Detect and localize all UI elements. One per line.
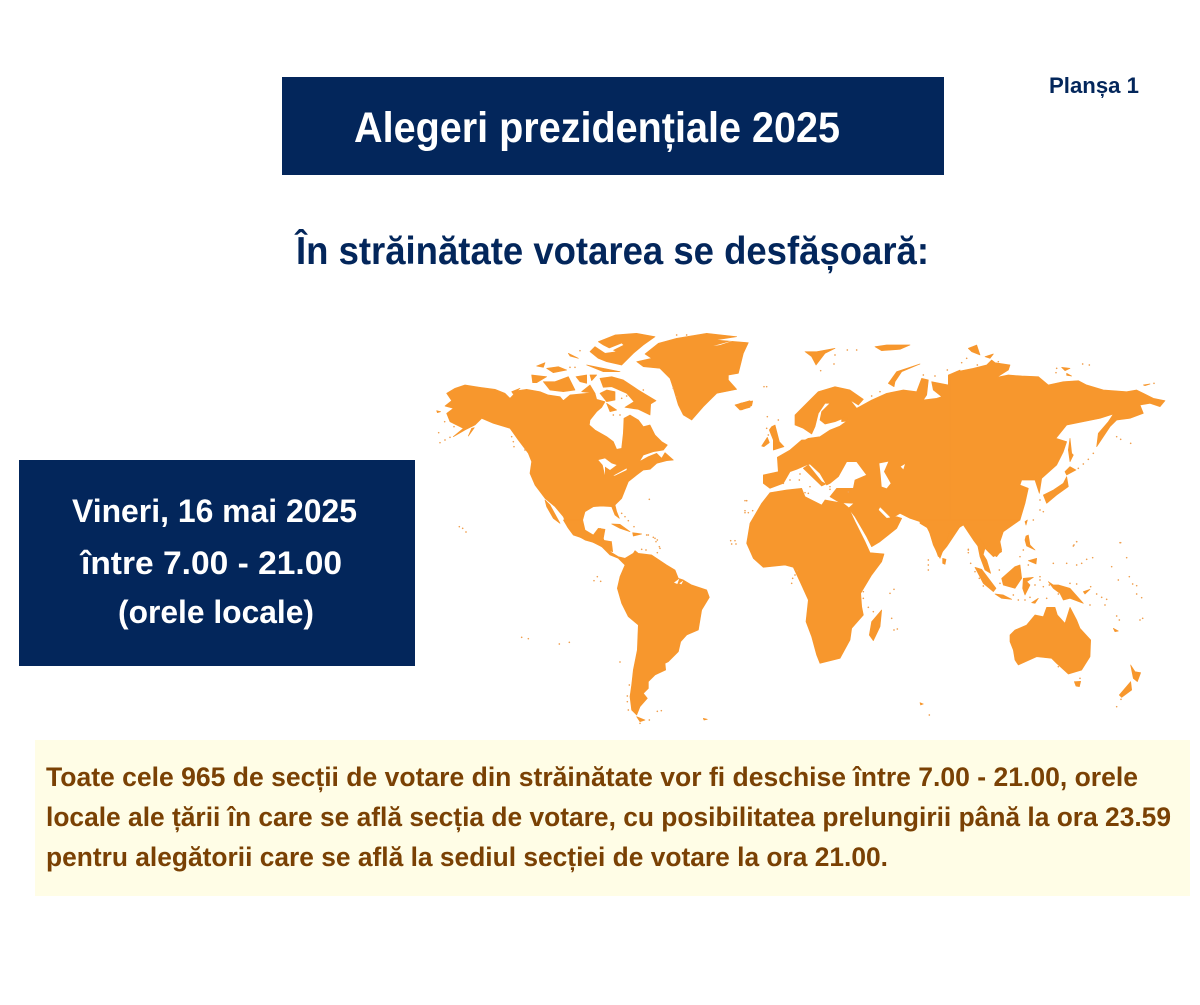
title banner — [282, 77, 944, 175]
panel: date and hours — [19, 460, 415, 666]
panel: explanatory note: pentru alegătorii care se află la sediul secției de votare la ora 21.00. — [46, 842, 888, 872]
panel: date and hours: (orele locale) — [118, 594, 314, 630]
panel: explanatory note: Toate cele 965 de secții de votare din străinătate vor fi deschise între 7.00 - 21.00, orele — [46, 762, 1138, 792]
title banner: Alegeri prezidențiale 2025 — [354, 104, 840, 152]
panel: explanatory note: locale ale țării în care se află secția de votare, cu posibilitatea prelungirii până la ora 23.59 — [46, 802, 1171, 832]
plate label: Planșa 1 — [1049, 73, 1139, 98]
island dots: north america — [439, 335, 745, 547]
panel: explanatory note — [35, 740, 1190, 896]
world map — [437, 333, 1165, 723]
panel: date and hours: între 7.00 - 21.00 — [79, 545, 342, 581]
panel: date and hours: Vineri, 16 mai 2025 — [72, 493, 357, 529]
island dots: south america — [522, 535, 661, 723]
island dots: africa — [745, 501, 897, 630]
heading: În străinătate votarea se desfășoară: — [294, 229, 929, 273]
island dots: southeast asia and oceania — [928, 542, 1143, 715]
island dots: europe — [747, 350, 947, 501]
island dots: north pacific — [962, 358, 1154, 550]
